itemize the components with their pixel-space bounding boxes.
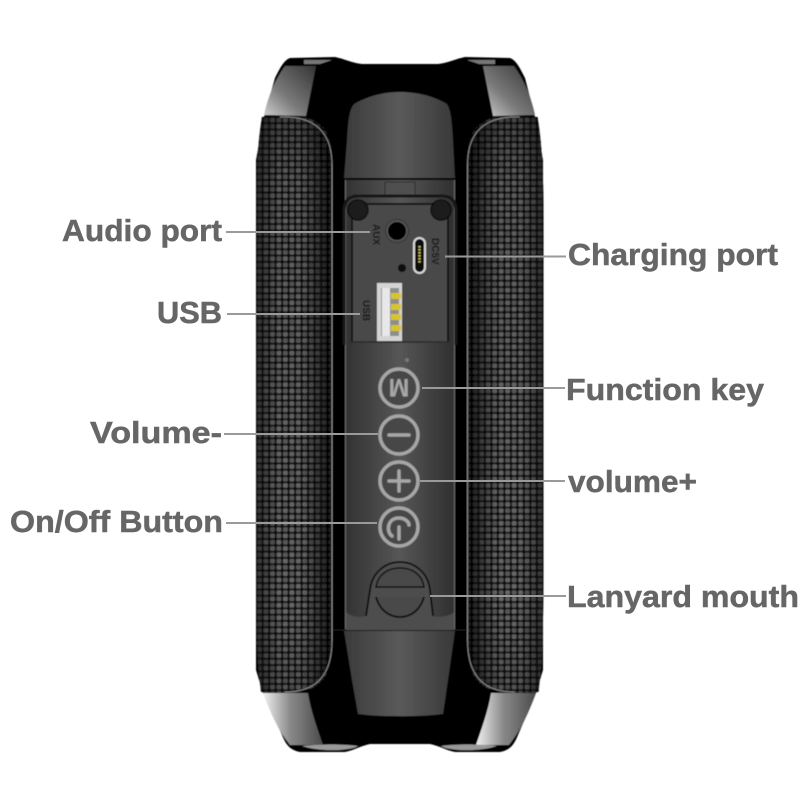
AUX mark: AUX [370,224,381,245]
DC5V mark: DC5V [429,238,440,265]
callout: audio port: Audio port [62,213,222,248]
indicator light [405,358,409,362]
button: function [380,369,418,407]
button: power [380,508,418,546]
screw left [348,200,368,220]
callout: charging port: Charging port [568,237,778,272]
port compartment [344,196,456,345]
latch tab [385,182,415,195]
audio jack [386,220,408,242]
callout: USB: USB [157,295,222,330]
indicator hole [398,264,406,272]
USB mark: USB [360,300,371,321]
top cap [344,92,455,178]
callout: lanyard mouth: Lanyard mouth [567,579,799,614]
left grille [256,117,332,693]
centre panel [346,180,454,630]
callout: function key: Function key [566,372,765,407]
button: volume minus [380,416,418,454]
micro USB charging port [414,238,425,273]
callout: volume plus: volume+ [568,464,697,499]
lanyard mouth [346,562,454,630]
button: function: M [389,373,409,401]
chrome highlights left side [263,60,358,750]
chrome highlights right side [441,60,536,750]
button: volume plus [380,462,418,500]
callout: volume minus: Volume- [90,415,222,450]
bottom cap [344,631,455,716]
speaker body [256,57,544,752]
screw right [431,200,451,220]
right grille [468,117,544,693]
callout: on/off button: On/Off Button [10,504,223,539]
panel side edges [346,180,454,630]
USB port [377,283,402,341]
body silhouette [256,57,543,752]
